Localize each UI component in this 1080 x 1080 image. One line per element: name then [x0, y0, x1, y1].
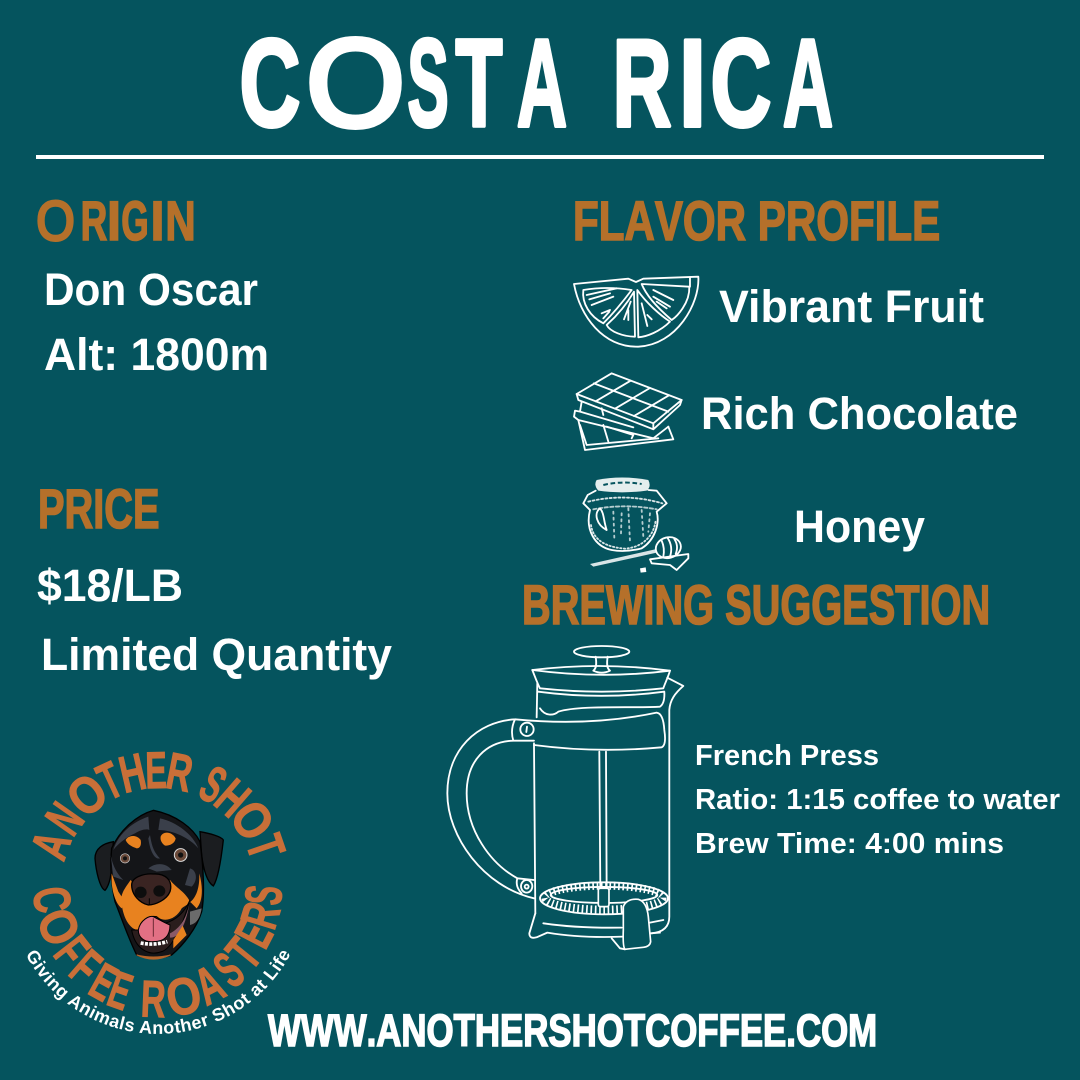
logo ring text: top: H [114, 743, 151, 805]
price details: $18/LB [37, 560, 183, 611]
heading: origin: I [107, 191, 121, 253]
logo ring text: top: H [204, 769, 261, 829]
price details: Limited Quantity [41, 629, 392, 680]
heading: origin: I [150, 191, 165, 253]
label: vibrant fruit: Vibrant Fruit [719, 281, 984, 332]
logo ring text: top [20, 742, 296, 867]
logo ring text: bottom: R [230, 896, 292, 935]
logo ring text: bottom: A [186, 954, 234, 1017]
heading: origin: G [121, 190, 149, 252]
title [240, 13, 833, 153]
logo ring text: top: O [56, 762, 119, 829]
brewing details: French Press [695, 740, 879, 772]
logo ring text: bottom: R [140, 970, 167, 1029]
logo tagline: Giving Animals Another Shot at Life [28, 950, 290, 1034]
logo ring text: bottom: O [25, 900, 92, 955]
logo ring text: bottom: F [59, 940, 111, 996]
heading: origin: R [81, 190, 107, 253]
logo ring text: bottom: T [216, 928, 273, 980]
logo ring text: top: E [145, 742, 167, 800]
icon: honey jar [583, 477, 688, 573]
heading: origin [36, 190, 196, 253]
logo ring text: bottom: S [203, 941, 255, 998]
heading: origin: O [36, 190, 75, 253]
title: A [783, 15, 833, 153]
origin details: Alt: 1800m [44, 329, 269, 380]
label: honey: Honey [794, 501, 925, 552]
logo ring text: top: O [218, 790, 286, 851]
title: I [679, 13, 706, 153]
heading: price: PRICE [38, 478, 159, 541]
origin details [44, 264, 269, 380]
logo ring text: top: S [191, 754, 236, 814]
icon: french press [447, 646, 683, 949]
origin details: Don Oscar [44, 264, 258, 315]
logo ring text: top: N [35, 793, 96, 845]
title: S [407, 13, 449, 153]
price details [37, 560, 392, 680]
icon: chocolate bar [574, 373, 682, 450]
icon: rottweiler head [95, 810, 223, 959]
title: C [240, 15, 300, 153]
logo ring text: bottom: S [233, 883, 293, 908]
icon: citrus slice [574, 277, 698, 347]
logo ring text: top: T [234, 828, 296, 867]
logo ring text: bottom: O [161, 965, 207, 1029]
logo ring text: top: R [162, 742, 197, 804]
label: rich chocolate: Rich Chocolate [701, 388, 1018, 439]
brewing details [695, 740, 1060, 860]
heading: flavor profile: FLAVOR PROFILE [573, 190, 940, 252]
brewing details: Brew Time: 4:00 mins [695, 828, 1004, 860]
title: R [612, 15, 672, 153]
title: O [306, 14, 405, 153]
heading: origin: N [165, 190, 196, 252]
logo: another shot coffee roasters [20, 742, 296, 1034]
logo ring text: top: T [89, 751, 131, 812]
title: T [456, 14, 502, 152]
logo ring text: bottom: C [21, 883, 81, 917]
heading: brewing suggestion: BREWING SUGGESTION [522, 574, 990, 637]
logo ring text: bottom [21, 883, 293, 1029]
title: A [517, 15, 567, 153]
logo ring text: bottom: E [101, 961, 139, 1022]
title: C [711, 15, 771, 153]
logo ring text: top: A [20, 824, 83, 867]
logo ring text: bottom: E [80, 953, 126, 1013]
logo ring text: bottom: F [42, 926, 100, 977]
website url: WWW.ANOTHERSHOTCOFFEE.COM [268, 1006, 877, 1056]
logo ring text: bottom: E [225, 912, 285, 957]
brewing details: Ratio: 1:15 coffee to water [695, 784, 1060, 816]
